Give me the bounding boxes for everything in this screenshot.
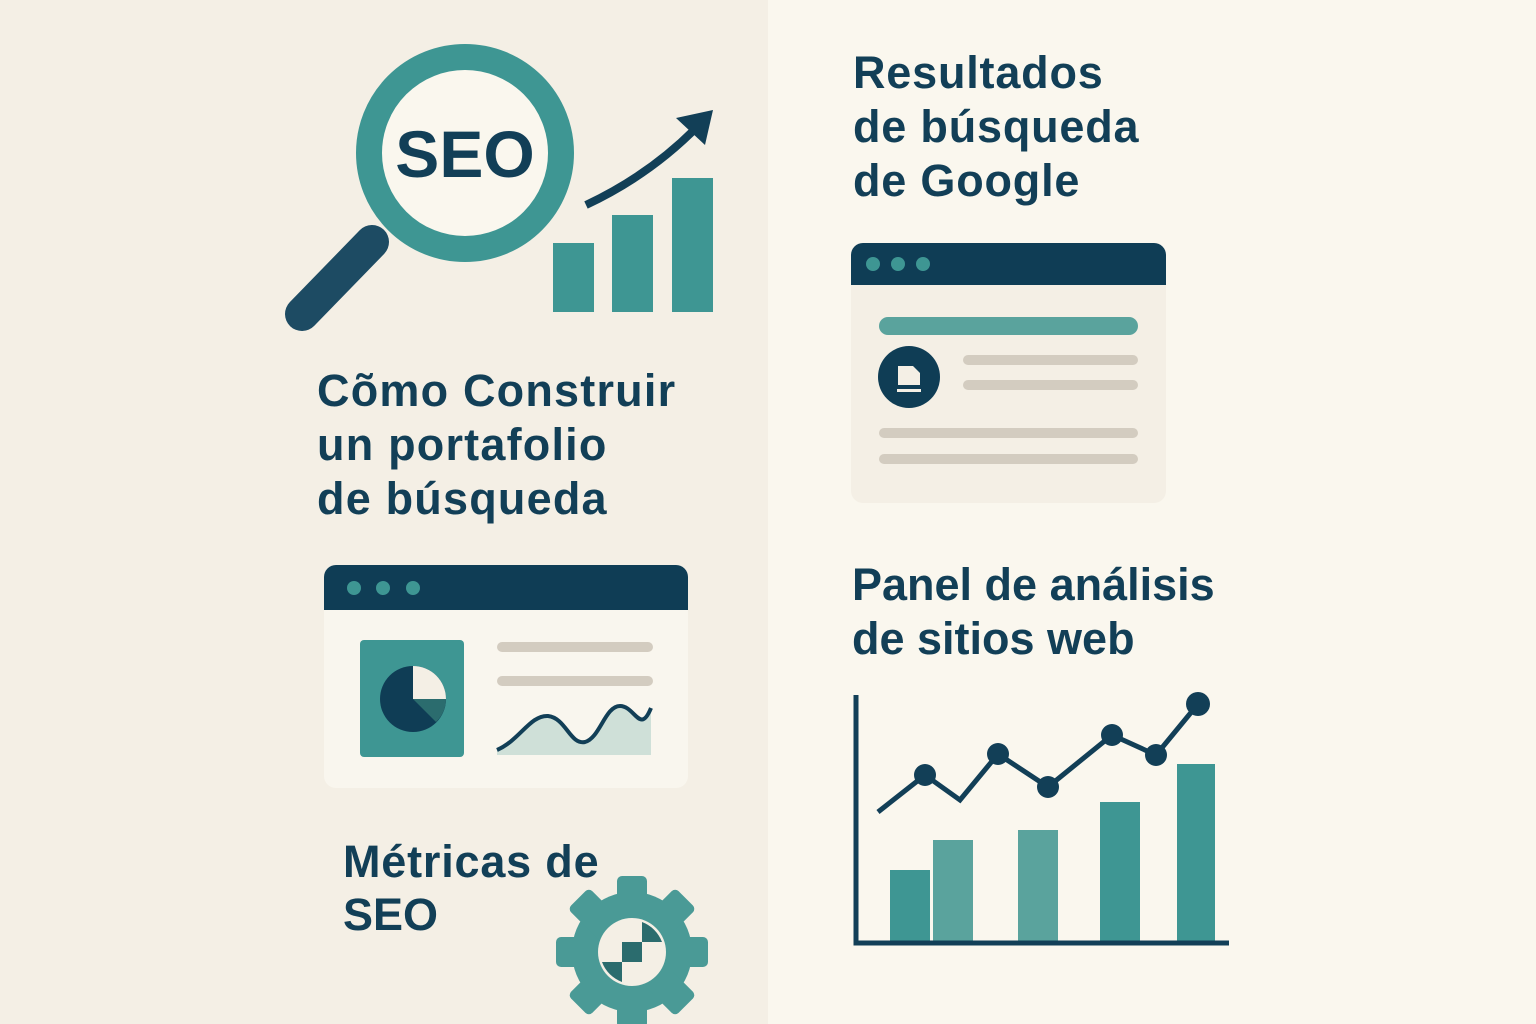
title: Resultados de búsqueda de Google: de Google	[853, 155, 1080, 206]
icon: search results browser window	[851, 243, 1166, 503]
icon: dashboard browser window	[324, 565, 688, 788]
icon: gear	[556, 876, 708, 1024]
title: Panel de análisis de sitios web: Panel de análisis	[852, 559, 1215, 610]
title: Panel de análisis de sitios web	[852, 559, 1215, 664]
title: Cómo Construir un portafolio de búsqueda: Cõmo Construir	[317, 365, 676, 416]
title: Cómo Construir un portafolio de búsqueda: de búsqueda	[317, 473, 608, 524]
title: Resultados de búsqueda de Google: Resultados	[853, 47, 1104, 98]
title: Métricas de SEO	[343, 836, 599, 940]
title: Cómo Construir un portafolio de búsqueda: un portafolio	[317, 419, 608, 470]
title: Métricas de SEO: SEO	[343, 889, 438, 940]
chart: bar and line analytics chart	[856, 692, 1229, 943]
icon: SEO magnifier with growth chart: SEO	[395, 117, 535, 191]
icon: SEO magnifier with growth chart	[302, 57, 713, 314]
title: Panel de análisis de sitios web: de sitios web	[852, 613, 1135, 664]
title: Resultados de búsqueda de Google	[853, 47, 1140, 206]
title: Cómo Construir un portafolio de búsqueda	[317, 365, 676, 524]
title: Métricas de SEO: Métricas de	[343, 836, 599, 887]
title: Resultados de búsqueda de Google: de búsqueda	[853, 101, 1140, 152]
